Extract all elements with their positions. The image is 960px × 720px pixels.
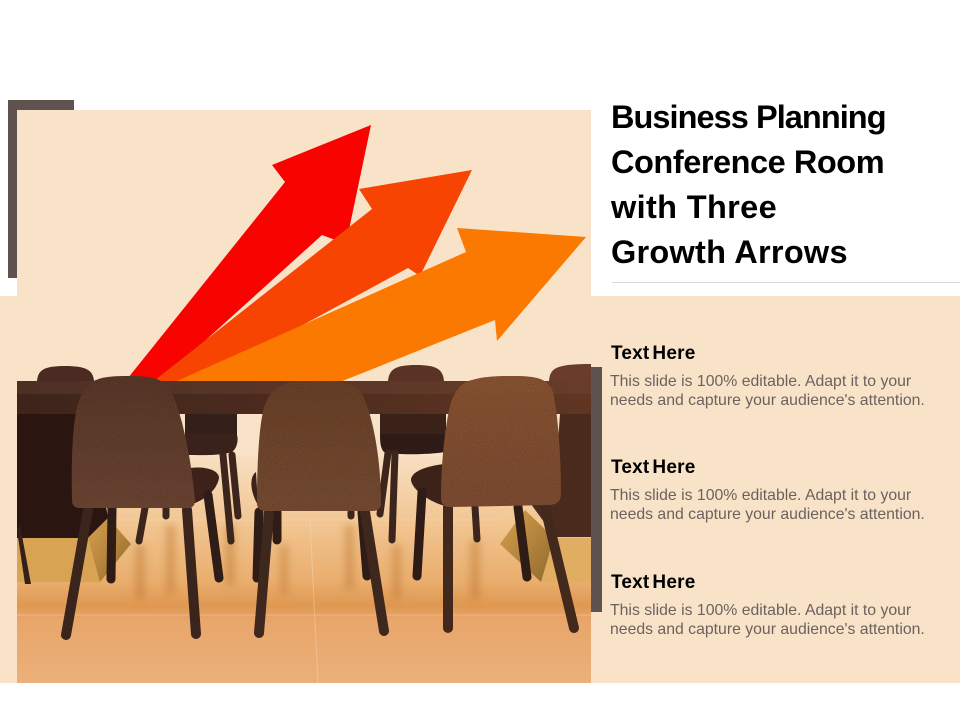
table base left <box>17 414 108 538</box>
table base right <box>528 414 591 537</box>
background panel <box>0 296 960 683</box>
body 3 <box>610 602 925 638</box>
title: Growth Arrows <box>611 234 848 270</box>
chair: center <box>251 381 384 633</box>
arrow: red <box>128 125 371 386</box>
chair: left <box>66 376 219 635</box>
body 1: This slide is 100% editable. Adapt it to your <box>610 373 911 390</box>
right accent bar <box>591 367 602 612</box>
text block 3 <box>610 572 925 638</box>
text block 1 <box>610 343 925 409</box>
heading 2: Text Here <box>611 457 696 478</box>
floor <box>17 456 591 683</box>
title: with Three <box>611 189 777 225</box>
arrow: orange-red <box>150 170 472 386</box>
body 3: This slide is 100% editable. Adapt it to your <box>610 602 911 619</box>
frame bracket <box>8 100 74 278</box>
wall <box>17 110 591 456</box>
arrow: orange <box>168 228 586 385</box>
gold block left <box>17 538 100 582</box>
floor tile lines <box>17 520 591 683</box>
body 1 <box>610 373 925 409</box>
left-edge table leg <box>17 525 31 584</box>
chair: right <box>411 376 574 628</box>
title <box>610 99 886 270</box>
body 3: needs and capture your audience's attention. <box>610 621 925 638</box>
back chairs <box>37 364 591 541</box>
floor reflections <box>135 525 480 600</box>
body 2: needs and capture your audience's attention. <box>610 506 925 523</box>
heading 1: Text Here <box>611 343 696 364</box>
gold block right <box>500 510 554 582</box>
heading 3: Text Here <box>611 572 696 593</box>
table top <box>17 381 591 414</box>
text block 2 <box>610 457 925 523</box>
body 2 <box>610 487 925 523</box>
title: Conference Room <box>611 144 884 180</box>
divider <box>612 282 960 283</box>
body 1: needs and capture your audience's attention. <box>610 392 925 409</box>
title: Business Planning <box>611 99 886 135</box>
body 2: This slide is 100% editable. Adapt it to your <box>610 487 911 504</box>
